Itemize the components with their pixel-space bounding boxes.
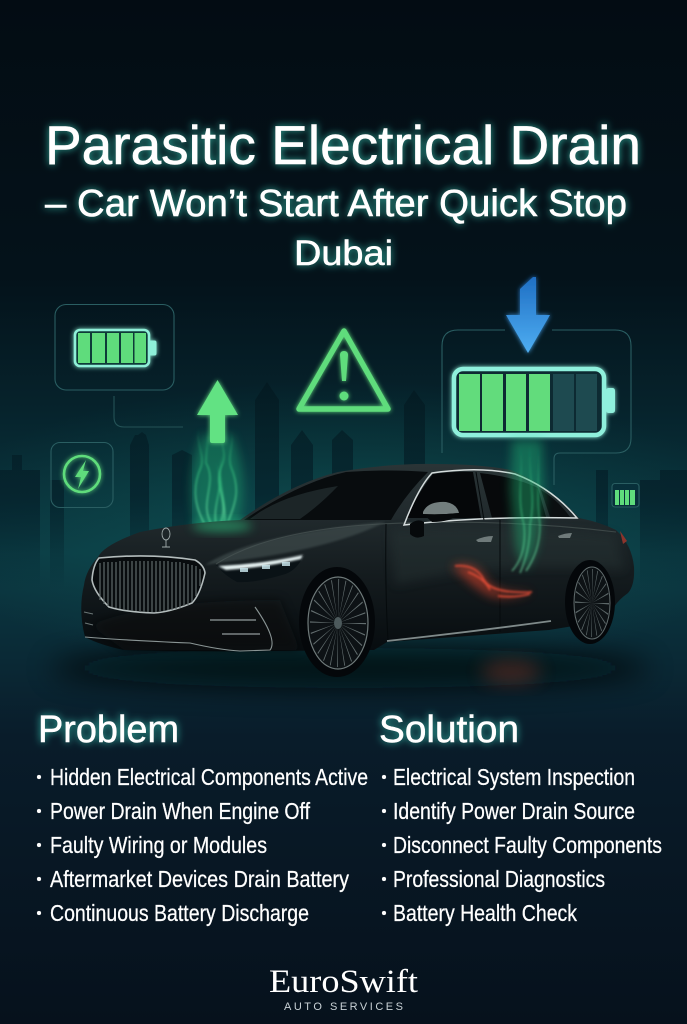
solution list: Battery Health Check — [393, 900, 577, 926]
car shading: lower front — [90, 600, 300, 650]
panel: large battery icon — [442, 330, 631, 485]
car shading: door sheen — [390, 527, 625, 585]
solution list: Identify Power Drain Source — [393, 798, 635, 824]
front tire — [299, 567, 375, 677]
chrome window trim — [404, 470, 577, 525]
front side window — [406, 472, 481, 518]
rear door window — [480, 473, 546, 518]
grille — [92, 556, 205, 613]
car highlight: shoulder line — [216, 522, 616, 564]
front wheel — [308, 577, 368, 669]
car hood highlight — [205, 522, 385, 565]
problem list — [37, 764, 368, 926]
side mirror — [423, 502, 459, 514]
door green drain wisps — [510, 440, 544, 573]
car — [81, 440, 634, 677]
title: Parasitic Electrical Drain — [45, 114, 641, 176]
problem list: Faulty Wiring or Modules — [50, 832, 267, 858]
icon: blue down arrow — [506, 277, 550, 353]
problem list: Power Drain When Engine Off — [50, 798, 311, 824]
headlight — [216, 555, 304, 582]
windshield reflection — [250, 486, 338, 519]
panel: solution — [379, 709, 662, 926]
red electrical drain glow — [452, 564, 533, 597]
icon: green up arrow — [191, 380, 243, 525]
heading: solution: Solution — [379, 709, 519, 751]
rear wheel — [574, 567, 610, 639]
problem list: Aftermarket Devices Drain Battery — [50, 866, 349, 892]
panel: lightning bolt icon — [51, 442, 113, 508]
title — [45, 114, 641, 273]
panel: problem — [37, 709, 368, 926]
door pillar — [386, 472, 500, 640]
icon: warning triangle — [299, 331, 388, 409]
heading: problem: Problem — [38, 709, 179, 751]
logo: EuroSwift Auto Services: AUTO SERVICES — [284, 1001, 403, 1013]
problem list: Continuous Battery Discharge — [50, 900, 309, 926]
title: – Car Won’t Start After Quick Stop — [45, 183, 627, 225]
logo: EuroSwift Auto Services: EuroSwift — [269, 964, 418, 1000]
solution list — [382, 764, 662, 926]
hood green glow — [192, 520, 252, 532]
side mirror base — [410, 513, 459, 538]
rear tire — [565, 560, 615, 644]
solution list: Professional Diagnostics — [393, 866, 605, 892]
door handles — [476, 533, 572, 542]
windshield — [244, 470, 428, 520]
floor reflection — [50, 648, 650, 688]
lower bumper — [84, 607, 272, 651]
icon: mini battery — [612, 484, 639, 507]
car body — [81, 464, 634, 651]
city skyline — [0, 382, 687, 590]
logo: EuroSwift Auto Services — [269, 964, 418, 1013]
rear quarter window — [541, 490, 570, 517]
title: Dubai — [294, 234, 393, 273]
hood ornament — [162, 528, 170, 547]
solution list: Electrical System Inspection — [393, 764, 635, 790]
side sill chrome — [387, 621, 551, 641]
tail light — [620, 531, 627, 544]
panel: small battery icon — [55, 304, 183, 427]
problem list: Hidden Electrical Components Active — [50, 764, 368, 790]
